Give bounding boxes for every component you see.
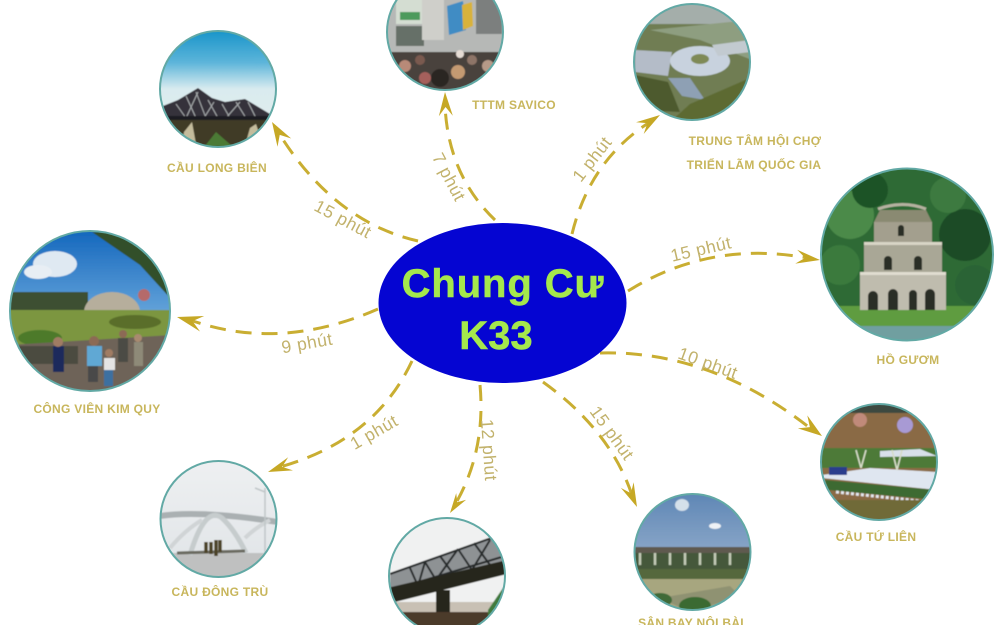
arrow: to Công viên Kim Quy [175, 309, 378, 334]
arrow: to Cầu Tứ Liên [600, 353, 827, 442]
time label: 1 phút: 1 phút [347, 410, 401, 454]
photo: Công viên Kim Quy [8, 230, 172, 393]
photo: Trung tâm Hội chợ [632, 2, 752, 122]
photo: bottom bridge [387, 516, 507, 625]
place label: HỒ GƯƠM [877, 352, 939, 367]
central ellipse: Chung Cư K33: K33 [459, 314, 533, 358]
time label: 15 phút: 15 phút [586, 402, 638, 464]
photo ring [634, 494, 750, 610]
photo: Cầu Long Biên [161, 32, 275, 146]
arrow: to Cầu Long Biên [265, 118, 418, 241]
photo: TTTM Savico [385, 0, 505, 92]
place label: TRUNG TÂM HỘI CHỢ [689, 133, 822, 148]
photo: Hồ Gươm (Tháp Rùa) [819, 166, 995, 344]
photo: Cầu Tứ Liên [819, 403, 939, 522]
photo ring [10, 231, 170, 391]
arrow: to Trung tâm Hội chợ [572, 109, 664, 234]
photo ring [634, 4, 750, 120]
photo ring [821, 404, 937, 520]
place label: TRIỂN LÃM QUỐC GIA [687, 157, 821, 172]
photo ring [160, 461, 276, 577]
time label: 7 phút: 7 phút [428, 150, 470, 204]
arrow: to Cầu Đông Trù [266, 361, 412, 479]
time label: 1 phút: 1 phút [568, 132, 616, 186]
photo ring [389, 518, 505, 625]
central ellipse: Chung Cư K33: Chung Cư [402, 262, 604, 306]
arrow: to bottom bridge [445, 385, 481, 516]
place label [687, 133, 822, 172]
place label: CÔNG VIÊN KIM QUY [33, 401, 161, 416]
photo ring [821, 168, 993, 340]
arrow: to Sân bay Nội Bài [543, 382, 643, 510]
time label: 15 phút: 15 phút [311, 196, 375, 242]
photo: Cầu Đông Trù [162, 462, 276, 576]
time label: 15 phút: 15 phút [669, 232, 733, 266]
place label: CẦU LONG BIÊN [167, 160, 267, 175]
photo ring [387, 0, 503, 90]
time label: 9 phút: 9 phút [280, 329, 334, 357]
photo ring [160, 31, 276, 147]
place label: CẦU TỨ LIÊN [836, 529, 916, 544]
arrow: to TTTM Savico [438, 92, 495, 220]
photo: Sân bay Nội Bài [636, 495, 750, 609]
place label: CẦU ĐÔNG TRÙ [172, 584, 268, 599]
time label: 10 phút: 10 phút [676, 343, 740, 383]
place label: TTTM SAVICO [472, 98, 556, 112]
arrow: to Hồ Gươm [628, 250, 821, 291]
time label: 12 phút: 12 phút [477, 418, 501, 482]
central ellipse: Chung Cư K33 [378, 223, 626, 383]
